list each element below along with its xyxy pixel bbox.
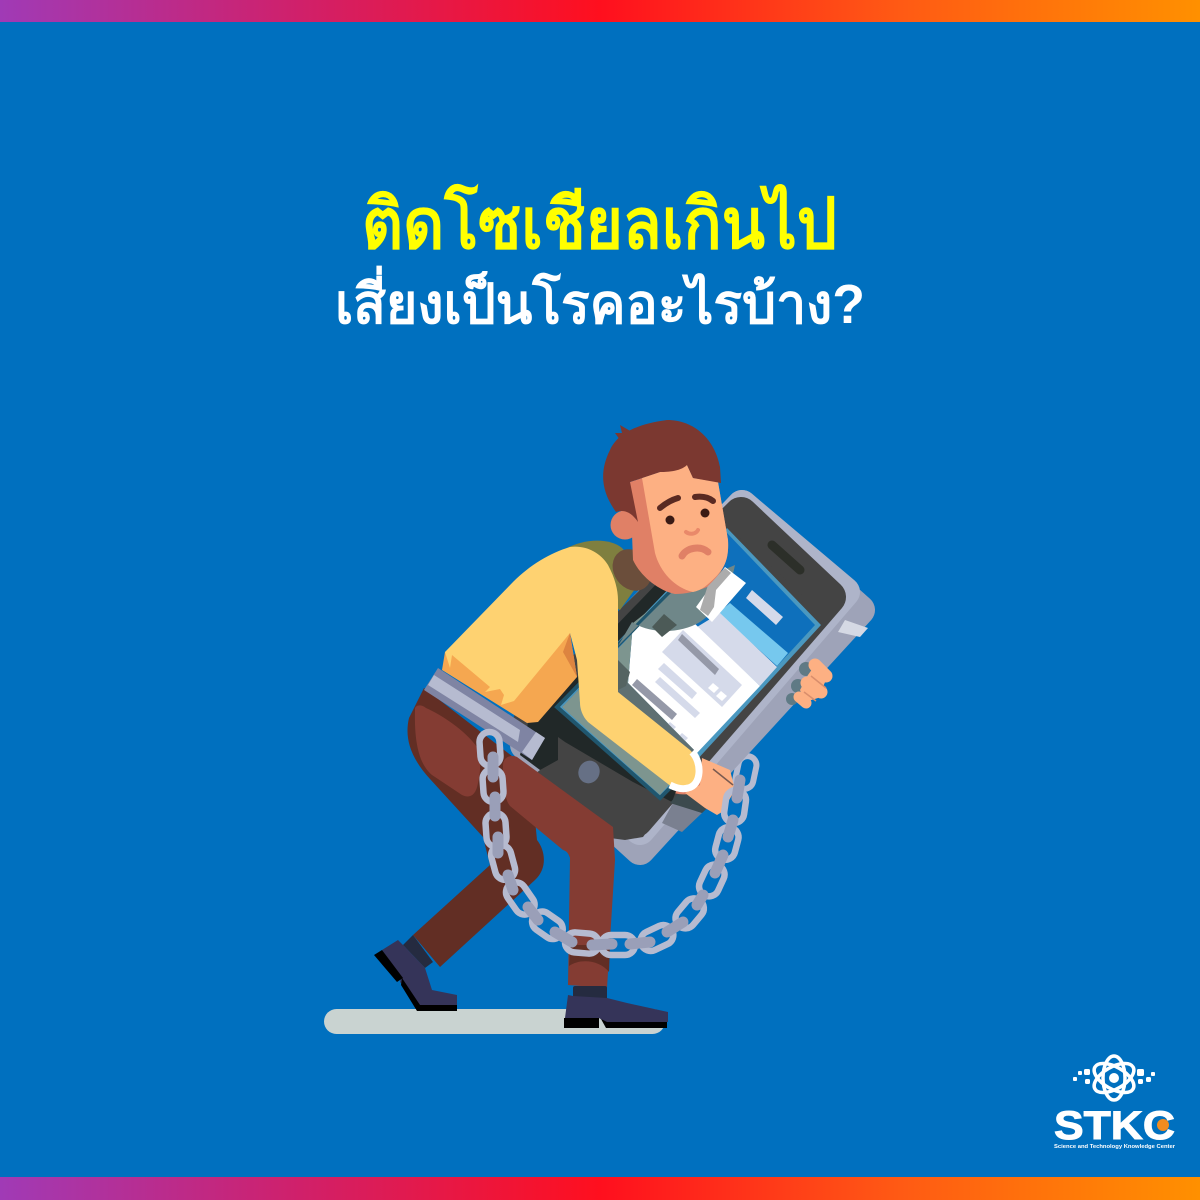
teal outline: [557, 590, 672, 798]
screen shaded left area: [562, 592, 697, 795]
chain: [479, 731, 747, 955]
chain side links: [493, 757, 740, 945]
back shoe: [374, 935, 457, 1011]
sole: [601, 1019, 667, 1028]
title line 1: ติดโซเชียลเกินไป: [362, 183, 837, 263]
sole: [401, 978, 457, 1011]
heel: [374, 950, 403, 982]
chain rings: [479, 731, 747, 955]
sock: [403, 935, 433, 968]
finger shadow two: [791, 679, 805, 693]
screen white post area: [628, 622, 760, 753]
post line one: [658, 663, 697, 699]
heel: [564, 1018, 599, 1028]
right hand holding phone: [786, 662, 826, 705]
light blue band: [718, 603, 788, 666]
neck: [605, 542, 659, 598]
title line 2: เสี่ยงเป็นโรคอะไรบ้าง?: [335, 265, 865, 335]
logo dots: [1073, 1069, 1155, 1084]
right eye: [700, 508, 710, 518]
waist shackle: [424, 668, 545, 760]
nose: [686, 530, 698, 534]
post thumbnail two: [716, 691, 727, 701]
finger gaps: [804, 676, 826, 701]
phone side body: [525, 505, 860, 850]
lavender band: [697, 613, 777, 686]
sock: [573, 986, 607, 1000]
back leg: [407, 688, 544, 967]
palm: [800, 665, 826, 702]
cuff shadow: [676, 768, 705, 792]
white post tab: [696, 567, 746, 622]
lower rim shadow: [662, 803, 702, 832]
phone rim: [525, 505, 845, 830]
shackle dark edge: [424, 668, 545, 760]
logo tagline: Science and Technology Knowledge Center: [1054, 1144, 1176, 1150]
face: [642, 465, 728, 592]
post small square one: [665, 722, 676, 732]
illustration: man chained to smartphone: [374, 420, 868, 1028]
shackle end: [522, 732, 545, 760]
left eye: [666, 516, 674, 524]
strip between arm and post: [618, 675, 697, 762]
finger three: [799, 697, 806, 703]
left eyebrow: [660, 498, 678, 508]
shirt and arm: [445, 547, 698, 789]
chin shadow on screen: [618, 565, 735, 646]
post grey line: [632, 679, 677, 720]
front leg: [503, 756, 615, 988]
ground shadow: [324, 1009, 665, 1034]
home button: [575, 757, 603, 787]
finger two: [807, 683, 821, 692]
lower bezel: [530, 737, 670, 840]
head: [603, 420, 728, 594]
shirt fold: [563, 633, 577, 677]
screen border: [555, 528, 821, 800]
finger shadows: [799, 662, 813, 676]
finger shadow three: [786, 693, 798, 705]
arm shadow on bezel: [670, 790, 716, 813]
post thumbnail one: [708, 683, 719, 693]
shackle band: [428, 675, 520, 742]
bottom gradient bar: [0, 1177, 1200, 1200]
white cuff: [670, 752, 699, 789]
front shoe: [564, 986, 668, 1028]
mouth: [682, 548, 708, 556]
finger line: [713, 769, 733, 785]
dark patch at arm: [618, 660, 630, 690]
speaker slot: [772, 545, 800, 570]
post small square two: [677, 733, 688, 743]
STKC logo: [1054, 1056, 1176, 1150]
top gradient bar: [0, 0, 1200, 22]
logo orange dot: [1157, 1119, 1169, 1131]
logo wordmark: STKC: [1054, 1104, 1175, 1148]
shirt shaded body: [442, 633, 577, 723]
tab shadow: [700, 568, 731, 616]
hair tuft: [615, 425, 632, 440]
smartphone: [520, 505, 868, 850]
ear: [610, 510, 640, 540]
upper: [565, 995, 668, 1023]
screen blue fill: [562, 533, 815, 793]
hand: [685, 758, 735, 815]
side highlight: [838, 620, 868, 637]
chain link behind phone: [734, 754, 758, 790]
shadow diamond: [652, 614, 677, 637]
atom icon: [1089, 1056, 1139, 1100]
right eyebrow: [695, 497, 713, 501]
post card title: [678, 634, 719, 675]
face shade: [630, 465, 728, 594]
collar backpack: [565, 541, 645, 610]
post line two: [655, 677, 700, 718]
finger one: [815, 665, 826, 676]
hair: [603, 420, 721, 522]
torso and arm: [442, 541, 698, 789]
post card: [662, 630, 742, 707]
header bar: [746, 590, 783, 625]
legs and trousers: [407, 688, 615, 988]
left hand: [670, 752, 735, 815]
shoe upper: [382, 940, 457, 1005]
haunch highlight: [415, 705, 480, 796]
front cuff shadow: [569, 945, 610, 972]
bezel: [530, 514, 829, 820]
shadowed bezel area: [520, 660, 680, 802]
dark bezel strip near collar: [610, 575, 680, 660]
